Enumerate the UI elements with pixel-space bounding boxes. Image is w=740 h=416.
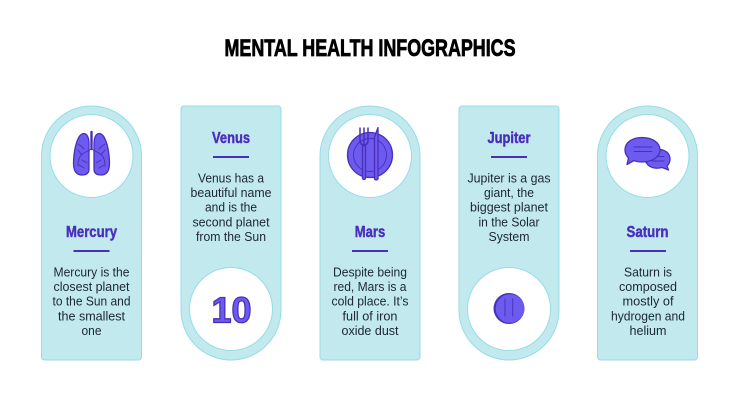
text: Mars description: red, Mars is a <box>334 279 407 294</box>
panel: Jupiter <box>459 106 559 360</box>
text: Saturn description: hydrogen and <box>611 308 685 323</box>
text: Jupiter description <box>468 170 551 244</box>
heading: Saturn: Saturn <box>626 224 668 241</box>
text: Venus description: and is the <box>205 200 257 215</box>
text: Jupiter description: biggest planet <box>470 200 548 215</box>
panel: Venus <box>181 106 281 360</box>
text: Mercury description: one <box>82 323 102 338</box>
icon: number 10: 10 <box>212 290 252 330</box>
text: Mercury description: Mercury is the <box>54 264 130 280</box>
text: Mars description: cold place. It’s <box>332 294 409 309</box>
text: Mercury description <box>52 264 130 338</box>
panel: Mercury <box>42 106 142 360</box>
text: Mercury description: closest planet <box>54 279 130 294</box>
panel: Saturn <box>598 106 698 360</box>
text: Jupiter description: in the Solar <box>478 214 540 229</box>
text: Jupiter description: System <box>488 229 530 244</box>
text: Mars description <box>332 264 409 338</box>
icon: lungs <box>74 132 110 175</box>
text: Saturn description <box>611 264 685 338</box>
icon: chat bubbles <box>625 138 670 170</box>
text: Venus description <box>190 170 272 244</box>
text: Mercury description: the smallest <box>58 308 125 323</box>
text: Jupiter description: Jupiter is a gas <box>468 170 551 186</box>
icon: plate with cutlery <box>348 128 392 180</box>
title: MENTAL HEALTH INFOGRAPHICS <box>224 35 516 62</box>
text: Venus description: from the Sun <box>196 229 266 244</box>
text: Mars description: oxide dust <box>342 323 399 338</box>
text: Venus description: beautiful name <box>190 185 272 200</box>
text: Saturn description: helium <box>630 323 666 338</box>
text: Venus description: Venus has a <box>198 170 265 186</box>
heading: Mercury: Mercury <box>66 224 117 241</box>
text: Venus description: second planet <box>192 214 270 229</box>
text: Saturn description: mostly of <box>622 294 674 309</box>
icon: round pill <box>494 293 524 324</box>
heading: Jupiter: Jupiter <box>488 130 530 147</box>
text: Mercury description: to the Sun and <box>52 294 130 309</box>
text: Saturn description: composed <box>619 279 677 294</box>
heading: Venus: Venus <box>212 130 250 147</box>
text: Jupiter description: giant, the <box>484 185 534 200</box>
panel: Mars <box>320 106 420 360</box>
text: Saturn description: Saturn is <box>624 264 672 280</box>
text: Mars description: full of iron <box>342 308 398 323</box>
heading: Mars: Mars <box>355 224 385 241</box>
text: Mars description: Despite being <box>333 264 407 280</box>
